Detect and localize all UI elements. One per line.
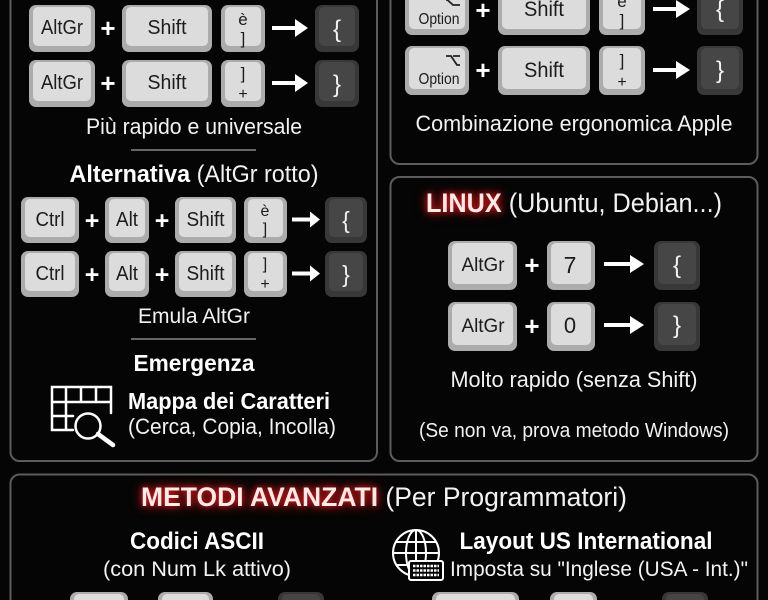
row: AltGr 7 to open brace: { — [673, 252, 681, 279]
panel: Mac shortcuts — [390, 0, 758, 164]
row: AltGr 7 to open brace: + — [524, 250, 540, 280]
key: code — [158, 592, 213, 600]
row: AltGr Shift è to open brace: Shift — [148, 17, 187, 39]
row: Ctrl Alt Shift è to open brace: Alt — [116, 209, 138, 231]
row: Option Shift è to open brace: ] — [620, 11, 624, 30]
row: Option Shift è to open brace: Option — [418, 11, 460, 28]
caption: very fast: Molto rapido (senza Shift) — [450, 367, 698, 392]
heading: emergency: Emergenza — [134, 350, 255, 376]
row: AltGr Shift ] to close brace: + — [238, 86, 248, 103]
row: Ctrl Alt Shift è to open brace: ] — [263, 221, 267, 238]
row: Ctrl Alt Shift ] to close brace: Shift — [186, 263, 225, 285]
row: AltGr 7 to open brace — [448, 241, 700, 290]
key: result — [662, 592, 708, 600]
row: Option Shift ] to close brace: Option — [418, 71, 460, 88]
row: Ctrl Alt Shift ] to close brace — [21, 251, 367, 297]
row: AltGr Shift è to open brace: ] — [241, 29, 245, 48]
caption: fastest: Più rapido e universale — [86, 114, 302, 139]
icon: character map grid with magnifier — [52, 387, 113, 445]
row: Ctrl Alt Shift è to open brace: è — [261, 203, 270, 220]
key: Alt — [70, 592, 128, 600]
row: AltGr 0 to close brace: AltGr — [462, 316, 505, 337]
row: AltGr Shift ] to close brace: + — [100, 68, 116, 98]
row: Ctrl Alt Shift è to open brace: { — [342, 207, 350, 233]
row: Ctrl Alt Shift è to open brace: + — [85, 207, 99, 235]
row: Ctrl Alt Shift ] to close brace: + — [155, 261, 169, 289]
heading: US International: Layout US International — [460, 528, 712, 555]
row: Ctrl Alt Shift è to open brace — [21, 197, 367, 243]
block: US International layout — [393, 528, 748, 600]
row: AltGr Shift ] to close brace — [29, 60, 359, 107]
caption: emulates AltGr: Emula AltGr — [138, 304, 250, 328]
caption: Apple ergonomic: Combinazione ergonomica Apple — [416, 111, 732, 136]
row: AltGr Shift è to open brace: { — [333, 16, 341, 43]
row: AltGr Shift ] to close brace: } — [333, 71, 341, 98]
key: result — [278, 592, 324, 600]
row: AltGr Shift è to open brace: + — [100, 13, 116, 43]
row: Ctrl Alt Shift è to open brace: Ctrl — [36, 209, 64, 231]
row: Option Shift ] to close brace: + — [475, 55, 491, 85]
text: Num Lock active: (con Num Lk attivo) — [103, 557, 291, 581]
row: Ctrl Alt Shift ] to close brace: Alt — [116, 263, 138, 285]
text: search copy paste: (Cerca, Copia, Incolla) — [128, 414, 336, 439]
row: AltGr 7 to open brace: 7 — [564, 252, 576, 278]
heading: advanced methods: METODI AVANZATI (Per Programmatori) — [141, 482, 627, 512]
row: Ctrl Alt Shift ] to close brace: ] — [263, 256, 267, 273]
row: AltGr Shift è to open brace — [29, 5, 359, 52]
row: Ctrl Alt Shift è to open brace: + — [155, 207, 169, 235]
panel: advanced methods — [10, 474, 758, 600]
row: AltGr 0 to close brace: } — [673, 312, 681, 339]
row: Option Shift ] to close brace: Shift — [524, 59, 564, 82]
row: AltGr 0 to close brace: 0 — [564, 313, 576, 338]
heading: ASCII codes: Codici ASCII — [130, 528, 264, 555]
row: Option Shift ] to close brace: ] — [620, 51, 624, 70]
block: ASCII codes — [70, 528, 324, 600]
heading: alternative: Alternativa (AltGr rotto) — [70, 161, 318, 188]
heading: Linux: LINUX (Ubuntu, Debian...) — [426, 188, 722, 218]
row: AltGr Shift ] to close brace: Shift — [148, 72, 187, 94]
row: AltGr Shift è to open brace: è — [238, 10, 248, 29]
row: Option Shift ] to close brace — [405, 46, 743, 95]
row: Option Shift è to open brace — [405, 0, 743, 35]
panel: Linux shortcuts — [390, 177, 758, 461]
row: AltGr 0 to close brace: + — [524, 311, 540, 341]
row: Ctrl Alt Shift ] to close brace: + — [85, 261, 99, 289]
row: Option Shift ] to close brace: + — [617, 74, 627, 91]
icon: globe with keyboard — [393, 530, 443, 580]
key: letter — [550, 592, 597, 600]
text: character map: Mappa dei Caratteri — [128, 388, 330, 414]
caption: fallback to Windows method: (Se non va, prova metodo Windows) — [419, 420, 729, 442]
row: Ctrl Alt Shift ] to close brace: } — [342, 261, 350, 287]
row: Ctrl Alt Shift ] to close brace: Ctrl — [36, 263, 64, 285]
key: AltGr — [432, 592, 519, 600]
row: AltGr Shift è to open brace: AltGr — [41, 17, 83, 39]
row: AltGr 7 to open brace: AltGr — [462, 255, 505, 276]
row: AltGr 0 to close brace — [448, 302, 700, 351]
panel: Windows shortcuts — [10, 0, 377, 461]
row: AltGr Shift ] to close brace: AltGr — [41, 72, 83, 94]
row: Ctrl Alt Shift è to open brace: Shift — [186, 209, 225, 231]
row: AltGr Shift ] to close brace: ] — [241, 64, 245, 83]
row: Option Shift ] to close brace: } — [716, 57, 724, 84]
text: set to English USA Int: Imposta su "Inglese (USA - Int.)" — [450, 557, 748, 581]
row: Ctrl Alt Shift ] to close brace: + — [260, 276, 270, 293]
